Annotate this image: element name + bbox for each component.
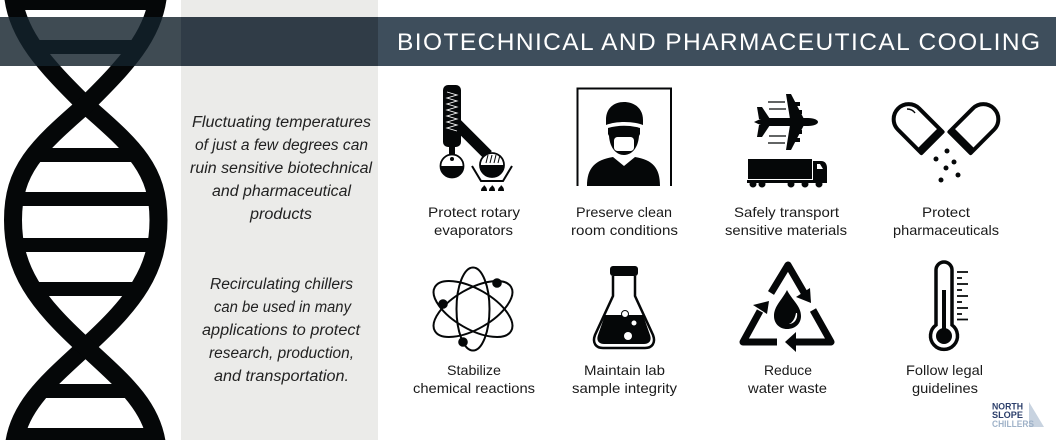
label: maintain lab sample integrity — [572, 362, 677, 396]
text block: fluctuating temperatures: Fluctuating temperatures — [192, 114, 371, 131]
label: reduce water waste — [747, 362, 827, 396]
label: follow legal guidelines — [906, 362, 983, 396]
logo: North Slope Chillers: SLOPE — [992, 410, 1023, 421]
icon: water recycling — [743, 265, 831, 352]
label: safely transport sensitive materials: Safely transport — [734, 204, 839, 220]
label: stabilize chemical reactions — [413, 362, 535, 396]
text block: recirculating chillers — [202, 276, 361, 385]
label: protect pharmaceuticals: Protect — [922, 204, 970, 220]
text block: fluctuating temperatures: of just a few degrees can — [195, 137, 368, 154]
label: preserve clean room conditions — [571, 204, 678, 238]
label: protect rotary evaporators: evaporators — [434, 222, 513, 238]
text block: recirculating chillers: applications to protect — [202, 322, 361, 339]
header band — [0, 17, 1056, 66]
text block: fluctuating temperatures — [190, 114, 373, 223]
DNA helix — [13, 0, 158, 440]
label: protect rotary evaporators: Protect rotary — [428, 204, 520, 220]
icon: rotary evaporator — [440, 85, 512, 191]
label: safely transport sensitive materials: sensitive materials — [725, 222, 847, 238]
label: stabilize chemical reactions: Stabilize — [447, 362, 501, 378]
panel: grey text column — [181, 0, 378, 440]
label: safely transport sensitive materials — [725, 204, 847, 238]
text block: recirculating chillers: can be used in many — [214, 299, 352, 316]
title: BIOTECHNICAL AND PHARMACEUTICAL COOLING — [397, 29, 1040, 56]
logo: North Slope Chillers: CHILLERS — [992, 419, 1034, 429]
logo: North Slope Chillers — [992, 402, 1044, 429]
text block: fluctuating temperatures: and pharmaceutical — [212, 183, 352, 200]
label: preserve clean room conditions: Preserve clean — [576, 204, 672, 220]
text block: recirculating chillers: and transportation. — [214, 368, 349, 385]
icon: open capsule — [887, 98, 1005, 182]
icon: atom — [425, 268, 521, 350]
icon: lab flask — [594, 266, 654, 348]
label: preserve clean room conditions: room conditions — [571, 222, 678, 238]
label: reduce water waste: Reduce — [764, 362, 812, 378]
icon: clean room technician — [578, 88, 671, 186]
label: follow legal guidelines: Follow legal — [906, 362, 983, 378]
text block: recirculating chillers: Recirculating chillers — [210, 276, 353, 293]
label: reduce water waste: water waste — [747, 380, 827, 396]
icon: airplane and truck — [747, 94, 827, 188]
text block: fluctuating temperatures: ruin sensitive biotechnical — [190, 160, 373, 177]
label: follow legal guidelines: guidelines — [912, 380, 978, 396]
text block: recirculating chillers: research, production, — [209, 345, 354, 362]
label: stabilize chemical reactions: chemical reactions — [413, 380, 535, 396]
label: maintain lab sample integrity: sample integrity — [572, 380, 677, 396]
label: maintain lab sample integrity: Maintain lab — [584, 362, 665, 378]
label: protect pharmaceuticals: pharmaceuticals — [893, 222, 999, 238]
label: protect pharmaceuticals — [893, 204, 999, 238]
icon: thermometer — [930, 262, 968, 349]
label: protect rotary evaporators — [428, 204, 520, 238]
logo: North Slope Chillers: NORTH — [992, 402, 1023, 412]
text block: fluctuating temperatures: products — [249, 206, 312, 223]
